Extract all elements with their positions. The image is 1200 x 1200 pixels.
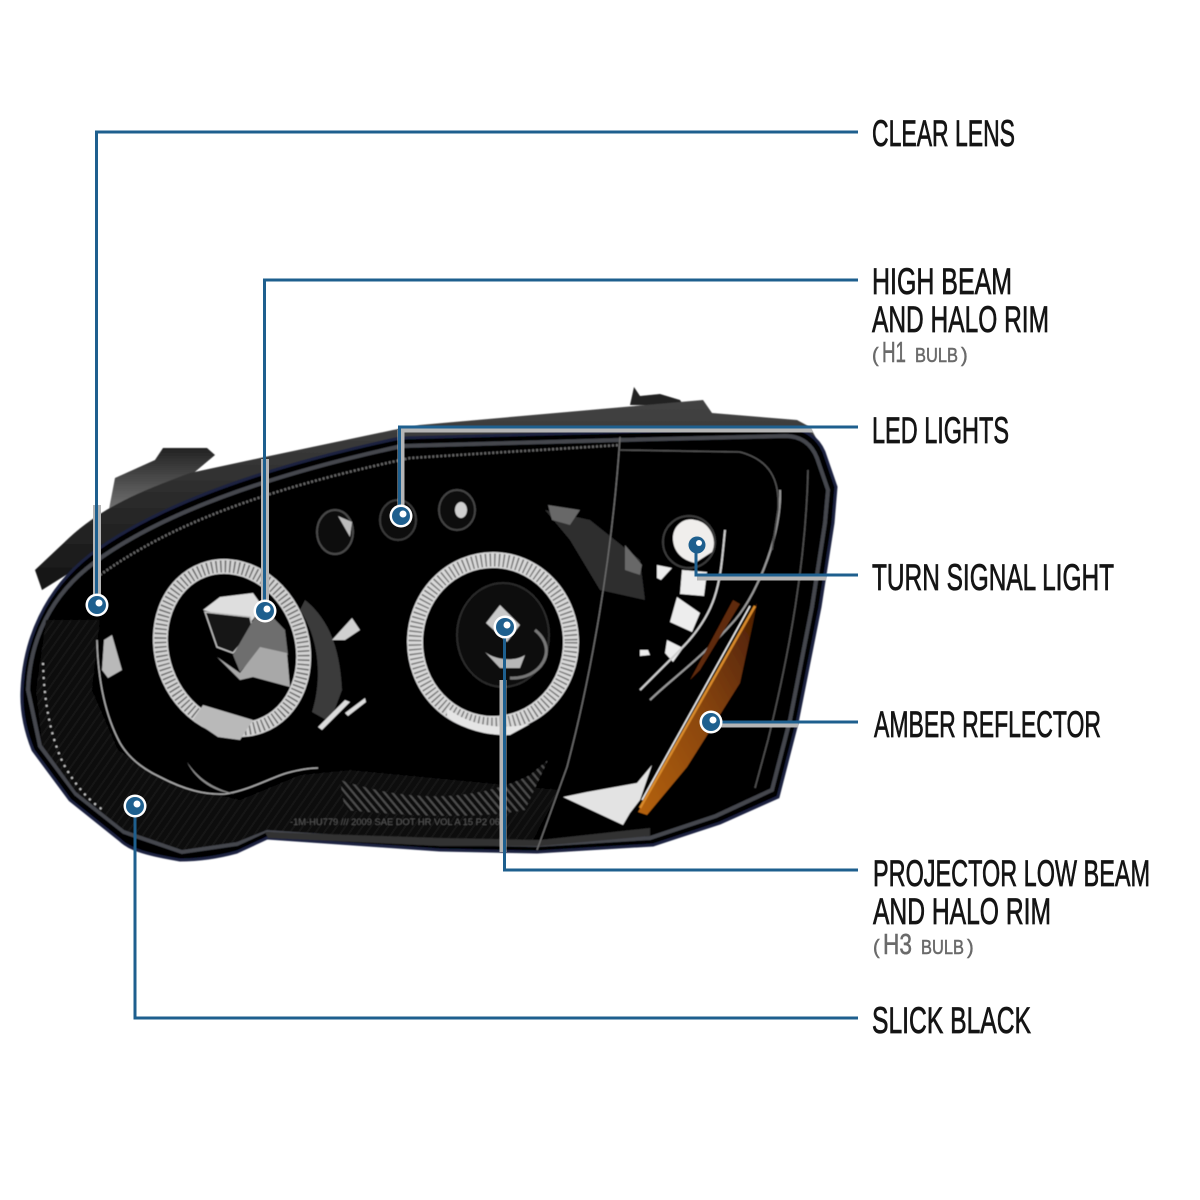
LED three — [439, 490, 475, 530]
LED one glint — [338, 516, 352, 537]
left reflector right facet — [232, 617, 289, 672]
LED housings — [317, 490, 475, 554]
right lens reflection bottom — [485, 652, 525, 668]
turn signal bulb socket — [663, 516, 715, 568]
label line two: AND HALO RIM — [872, 299, 1049, 340]
mounting tab left — [105, 448, 215, 530]
left ribbed band — [36, 620, 560, 850]
label: CLEAR LENS — [872, 113, 1015, 154]
callout: LED lights — [390, 410, 1009, 528]
callout: clear lens — [86, 113, 1015, 616]
reflection bottom — [187, 762, 235, 794]
dotted beads — [43, 663, 103, 810]
white amber trim — [642, 606, 750, 800]
lens rim highlight — [28, 436, 828, 852]
outer inner frame curve — [620, 450, 808, 788]
lens details — [28, 436, 828, 852]
black lens body — [22, 428, 836, 860]
right lens arc — [510, 630, 546, 678]
leader shadow — [401, 429, 858, 516]
reflection left — [102, 635, 122, 678]
headlight photo illustration — [22, 387, 836, 860]
leader line — [696, 550, 858, 575]
inner curved edge — [97, 640, 318, 794]
left reflector dark facet — [205, 612, 253, 653]
shroud slash — [318, 698, 366, 730]
left bracket — [193, 705, 253, 740]
amber edge highlight — [640, 606, 755, 808]
left projector bowl — [152, 558, 312, 741]
left reflector lower — [217, 647, 290, 687]
bottom moulding strip — [265, 828, 650, 846]
white chrome bottom reflection — [563, 765, 652, 825]
lens divider line — [537, 437, 620, 850]
right halo ring — [415, 560, 571, 724]
leader shadow — [93, 505, 101, 605]
label: LED LIGHTS — [872, 410, 1009, 451]
shroud highlight — [332, 618, 360, 640]
fan shroud right — [545, 510, 645, 600]
leader line — [504, 627, 858, 870]
callout: high beam and halo rim — [254, 261, 1049, 622]
leader shadow — [697, 574, 826, 580]
bulb note: ) — [961, 345, 968, 367]
small moulded text: -1M-HU779 /// 2009 SAE DOT HR VOL A 15 P2 06 — [290, 817, 500, 827]
leader shadow — [500, 680, 506, 852]
LED three glint — [455, 502, 467, 518]
callout: amber reflector — [700, 704, 1101, 745]
shroud reflections between projectors — [300, 600, 366, 730]
grey upper housing — [35, 400, 826, 590]
callout: slick black — [124, 794, 1031, 1041]
left reflector top facet — [203, 593, 263, 623]
leader line — [135, 806, 858, 1018]
label: SLICK BLACK — [872, 1000, 1031, 1041]
LED one — [317, 510, 353, 554]
top mounting tab — [630, 387, 684, 406]
label line two: AND HALO RIM — [873, 891, 1051, 932]
bulb note: H1 — [882, 337, 906, 369]
lower centre ribbed band — [340, 760, 548, 816]
leader line — [400, 427, 858, 516]
leader shadow — [261, 459, 269, 611]
marker dot — [390, 504, 412, 528]
left halo ring — [152, 558, 312, 738]
callout: turn signal light — [688, 536, 1114, 598]
label line one: HIGH BEAM — [872, 261, 1012, 302]
amber upper glow — [690, 600, 740, 680]
marker dot — [494, 616, 516, 638]
marker dot — [688, 536, 706, 554]
reflector bezel curve inner — [640, 530, 725, 690]
marker dot — [86, 594, 108, 616]
infographic canvas — [20, 120, 1148, 1034]
leader line — [264, 280, 858, 611]
bulb note: H3 — [883, 929, 912, 961]
fan shroud highlight — [548, 505, 642, 575]
left halo ticks — [154, 560, 310, 736]
reflector bezel curve — [650, 490, 780, 700]
leader line — [711, 720, 858, 724]
leader line — [96, 132, 858, 605]
right halo bottom glow — [447, 708, 530, 735]
bulb note: ( — [873, 937, 880, 959]
right projector — [415, 560, 571, 735]
right inner lens — [457, 583, 549, 687]
LED two — [380, 500, 416, 540]
bulb note: BULB — [915, 345, 958, 367]
bulb note: ) — [967, 937, 974, 959]
callout: projector low beam and halo rim — [494, 616, 1150, 961]
turn signal white bulb — [673, 519, 714, 563]
marker dot — [254, 600, 276, 622]
bulb note: ( — [872, 345, 879, 367]
leader shadow — [720, 720, 798, 728]
right lens reflection top — [486, 605, 520, 642]
shroud shape — [300, 600, 342, 722]
marker dot — [124, 794, 146, 818]
bulb note: BULB — [921, 937, 964, 959]
top dotted seam — [100, 445, 620, 575]
amber reflector — [638, 603, 757, 815]
marker dot — [700, 710, 722, 734]
right halo ticks — [415, 560, 571, 724]
turn signal chrome facets — [640, 565, 707, 662]
